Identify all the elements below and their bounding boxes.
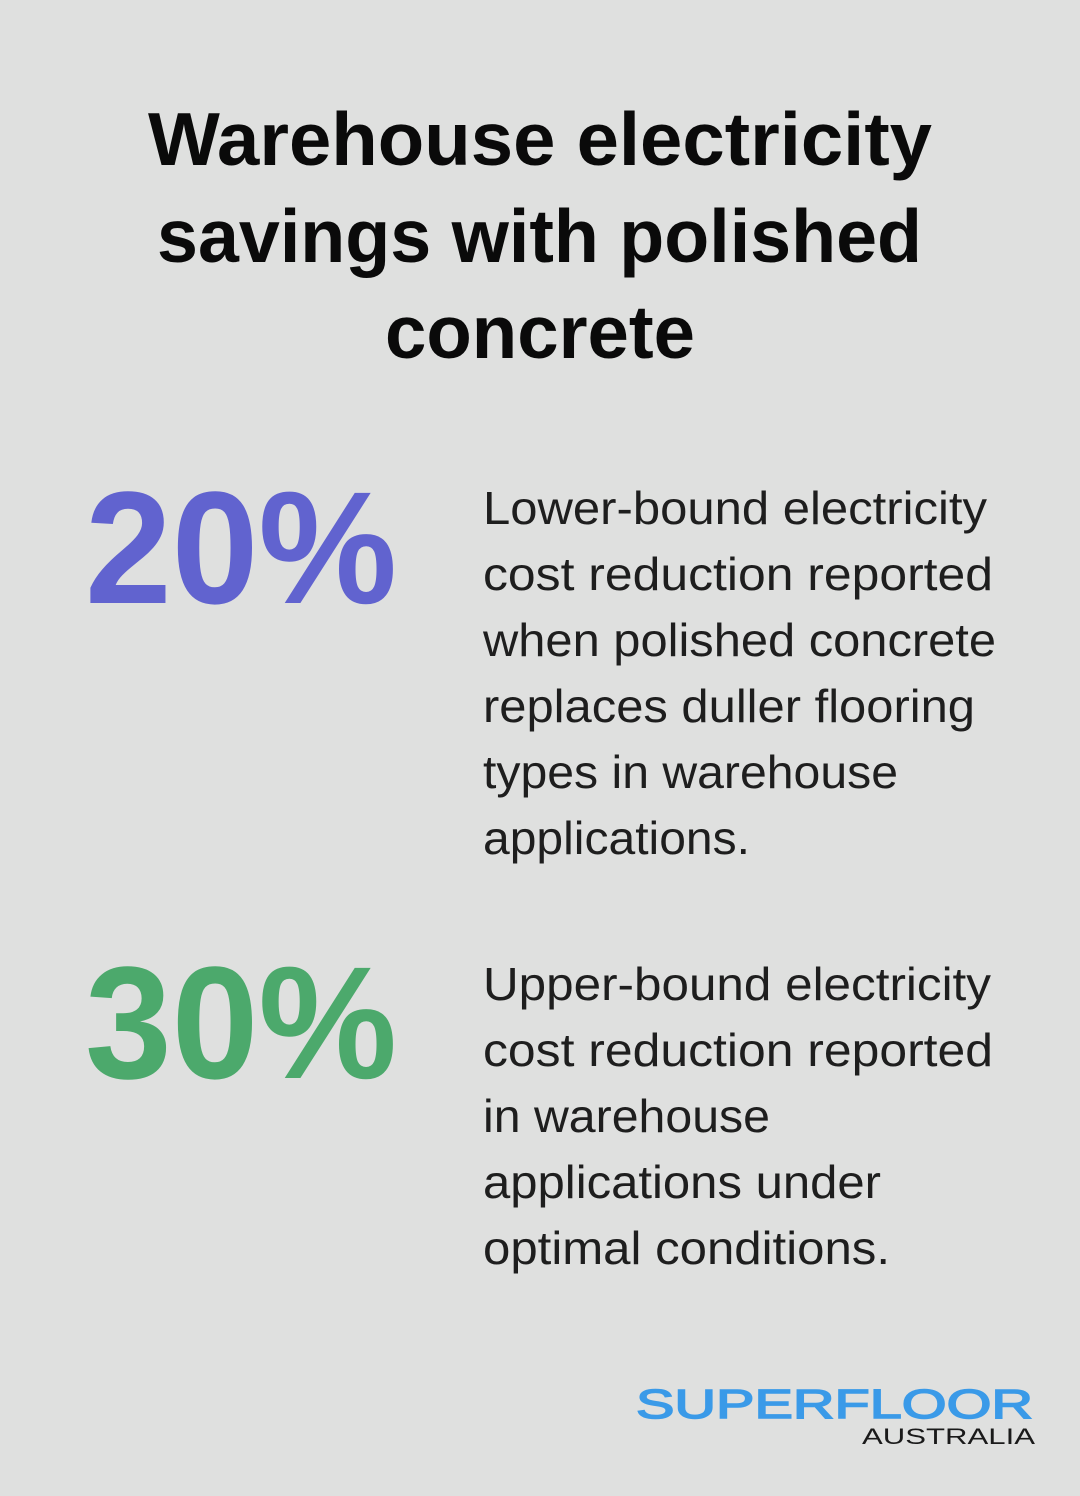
logo: AUSTRALIA xyxy=(862,1424,1035,1449)
number 20%: 20% xyxy=(85,458,397,637)
title: concrete xyxy=(385,290,695,374)
description 30%: cost reduction reported xyxy=(483,1024,993,1076)
number 30%: 30% xyxy=(85,933,397,1112)
description 20%: cost reduction reported xyxy=(483,548,993,600)
description 20%: applications. xyxy=(483,812,750,864)
title: savings with polished xyxy=(157,194,922,278)
title: Warehouse electricity xyxy=(148,97,932,181)
description 30%: in warehouse xyxy=(483,1090,770,1142)
stat: 30% xyxy=(85,933,993,1274)
description 30%: Upper-bound electricity xyxy=(483,958,991,1010)
description 20%: replaces duller flooring xyxy=(483,680,975,732)
description 20% xyxy=(482,482,996,864)
stat: 20% xyxy=(85,458,996,864)
description 30%: optimal conditions. xyxy=(483,1222,890,1274)
description 20%: types in warehouse xyxy=(483,746,898,798)
description 20%: when polished concrete xyxy=(482,614,996,666)
description 20%: Lower-bound electricity xyxy=(483,482,987,534)
logo: SUPERFLOOR xyxy=(636,1381,1033,1427)
description 30% xyxy=(483,958,993,1274)
logo xyxy=(636,1381,1035,1449)
description 30%: applications under xyxy=(483,1156,881,1208)
title xyxy=(148,97,932,374)
